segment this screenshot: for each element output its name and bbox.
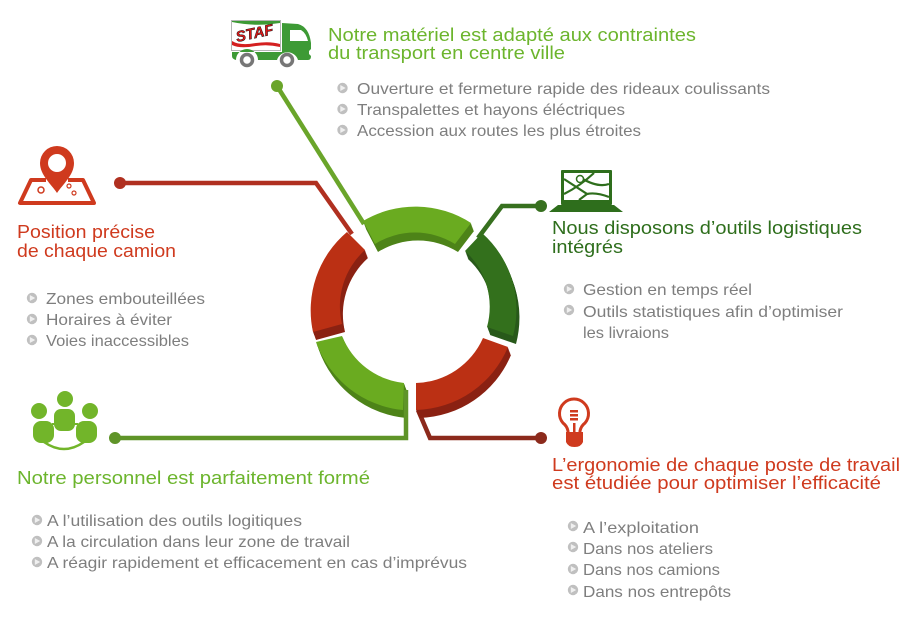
heading: position: Position précise (17, 222, 155, 242)
icon: light bulb (560, 399, 589, 447)
list: staff: A l’utilisation des outils logitiques (47, 513, 302, 530)
list: material (337, 81, 770, 140)
heading: position: de chaque camion (17, 241, 176, 261)
ring segment: bottom right red (416, 338, 511, 418)
connector: left red (114, 177, 352, 234)
heading: material (328, 25, 696, 63)
connector: bottom red (418, 410, 547, 444)
heading: tools: intégrés (552, 237, 623, 257)
heading: ergonomics: L’ergonomie de chaque poste de travail (552, 455, 900, 475)
ring segment: top green (363, 207, 474, 252)
list: position: Zones embouteillées (46, 291, 205, 308)
list: position (27, 291, 205, 350)
list: tools: Outils statistiques afin d’optimiser (583, 304, 844, 321)
list: staff: A réagir rapidement et efficacement en cas d’imprévus (47, 555, 467, 572)
heading: material: Notre matériel est adapté aux contraintes (328, 25, 696, 45)
list: position: Horaires à éviter (46, 312, 173, 329)
list: ergonomics: Dans nos camions (583, 562, 720, 579)
connector: right dark green (478, 200, 547, 238)
ring segment: bottom left green (316, 336, 407, 418)
heading: position (17, 222, 176, 261)
heading: staff: Notre personnel est parfaitement formé (17, 468, 370, 488)
list: ergonomics: Dans nos entrepôts (583, 584, 731, 601)
heading: tools (552, 218, 862, 257)
icon: team (31, 391, 98, 449)
ring diagram (311, 207, 519, 418)
list: tools: les livraions (583, 325, 669, 342)
list: ergonomics: A l’exploitation (583, 520, 699, 537)
list: staff (32, 513, 467, 572)
list: tools (564, 282, 844, 342)
list: ergonomics: Dans nos ateliers (583, 541, 713, 558)
heading: material: du transport en centre ville (328, 43, 565, 63)
list: staff: A la circulation dans leur zone de travail (47, 534, 350, 551)
list: material: Accession aux routes les plus étroites (357, 123, 641, 140)
ring segment: right dark green (465, 233, 519, 344)
icon: STAF truck (232, 20, 311, 66)
heading: tools: Nous disposons d’outils logistiques (552, 218, 862, 238)
list: position: Voies inaccessibles (46, 333, 189, 350)
ring segment: left red (311, 232, 368, 340)
icon: laptop (549, 170, 623, 212)
list: ergonomics (568, 520, 731, 601)
list: material: Ouverture et fermeture rapide des rideaux coulissants (357, 81, 770, 98)
heading: ergonomics (552, 455, 900, 493)
connector: top green (271, 80, 364, 224)
icon: STAF truck: STAF (234, 21, 276, 46)
list: tools: Gestion en temps réel (583, 282, 752, 299)
heading: ergonomics: est étudiée pour optimiser l’efficacité (552, 473, 881, 493)
icon: map pin (20, 146, 94, 203)
connector: bottom green (109, 390, 406, 444)
list: material: Transpalettes et hayons éléctriques (357, 102, 625, 119)
